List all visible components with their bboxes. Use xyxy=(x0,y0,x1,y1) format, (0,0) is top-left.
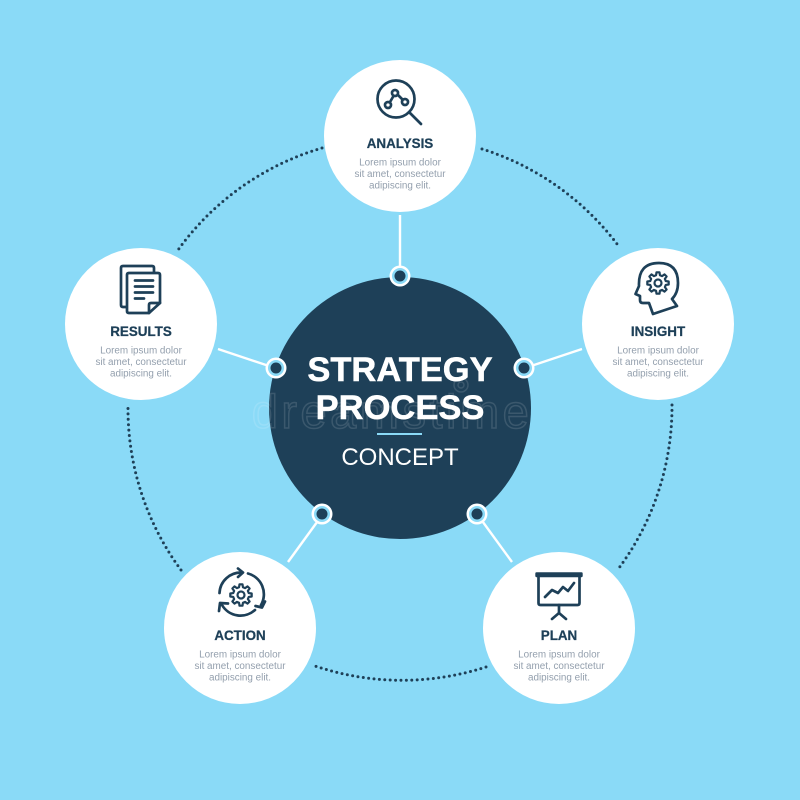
heading: insight: INSIGHT xyxy=(631,324,686,339)
text: results xyxy=(95,346,187,380)
title divider xyxy=(377,433,422,435)
icon: gear with cycle arrows xyxy=(219,568,265,616)
title: PROCESS xyxy=(316,389,484,427)
text: action: sit amet, consectetur xyxy=(194,661,286,672)
text: results: Lorem ipsum dolor xyxy=(100,346,183,356)
heading: results: RESULTS xyxy=(110,324,172,339)
title xyxy=(307,351,493,427)
text: results: adipiscing elit. xyxy=(110,368,172,380)
text: plan: Lorem ipsum dolor xyxy=(518,650,601,660)
dotted ring segments xyxy=(128,148,672,680)
icon: documents xyxy=(121,266,160,313)
panel: results xyxy=(65,248,217,400)
heading: plan: PLAN xyxy=(541,628,577,643)
icon: head with gear xyxy=(636,263,678,314)
subtitle: CONCEPT xyxy=(341,444,459,471)
text: action: Lorem ipsum dolor xyxy=(199,650,282,660)
text: insight: sit amet, consectetur xyxy=(612,357,704,368)
text: action xyxy=(194,650,286,684)
text: plan: adipiscing elit. xyxy=(528,672,590,684)
text: insight xyxy=(612,346,704,380)
panel: insight xyxy=(582,248,734,400)
text: insight: adipiscing elit. xyxy=(627,368,689,380)
heading: analysis: ANALYSIS xyxy=(367,136,433,151)
connector lines xyxy=(218,215,582,562)
panel: action xyxy=(164,552,316,704)
text: results: sit amet, consectetur xyxy=(95,357,187,368)
panel: analysis xyxy=(324,60,476,212)
text: analysis: adipiscing elit. xyxy=(369,180,431,192)
icon: presentation board xyxy=(536,574,582,619)
text: plan: sit amet, consectetur xyxy=(513,661,605,672)
text: analysis: sit amet, consectetur xyxy=(354,169,446,180)
watermark: dreamstime xyxy=(252,385,532,438)
text: analysis: Lorem ipsum dolor xyxy=(359,158,442,168)
central circle xyxy=(269,277,531,539)
text: insight: Lorem ipsum dolor xyxy=(617,346,700,356)
title: STRATEGY xyxy=(307,351,493,389)
panel: plan xyxy=(483,552,635,704)
heading: action: ACTION xyxy=(214,628,266,643)
text: action: adipiscing elit. xyxy=(209,672,271,684)
text: analysis xyxy=(354,158,446,192)
text: plan xyxy=(513,650,605,684)
icon: magnifier with network xyxy=(378,80,421,124)
connector nodes xyxy=(266,266,534,524)
